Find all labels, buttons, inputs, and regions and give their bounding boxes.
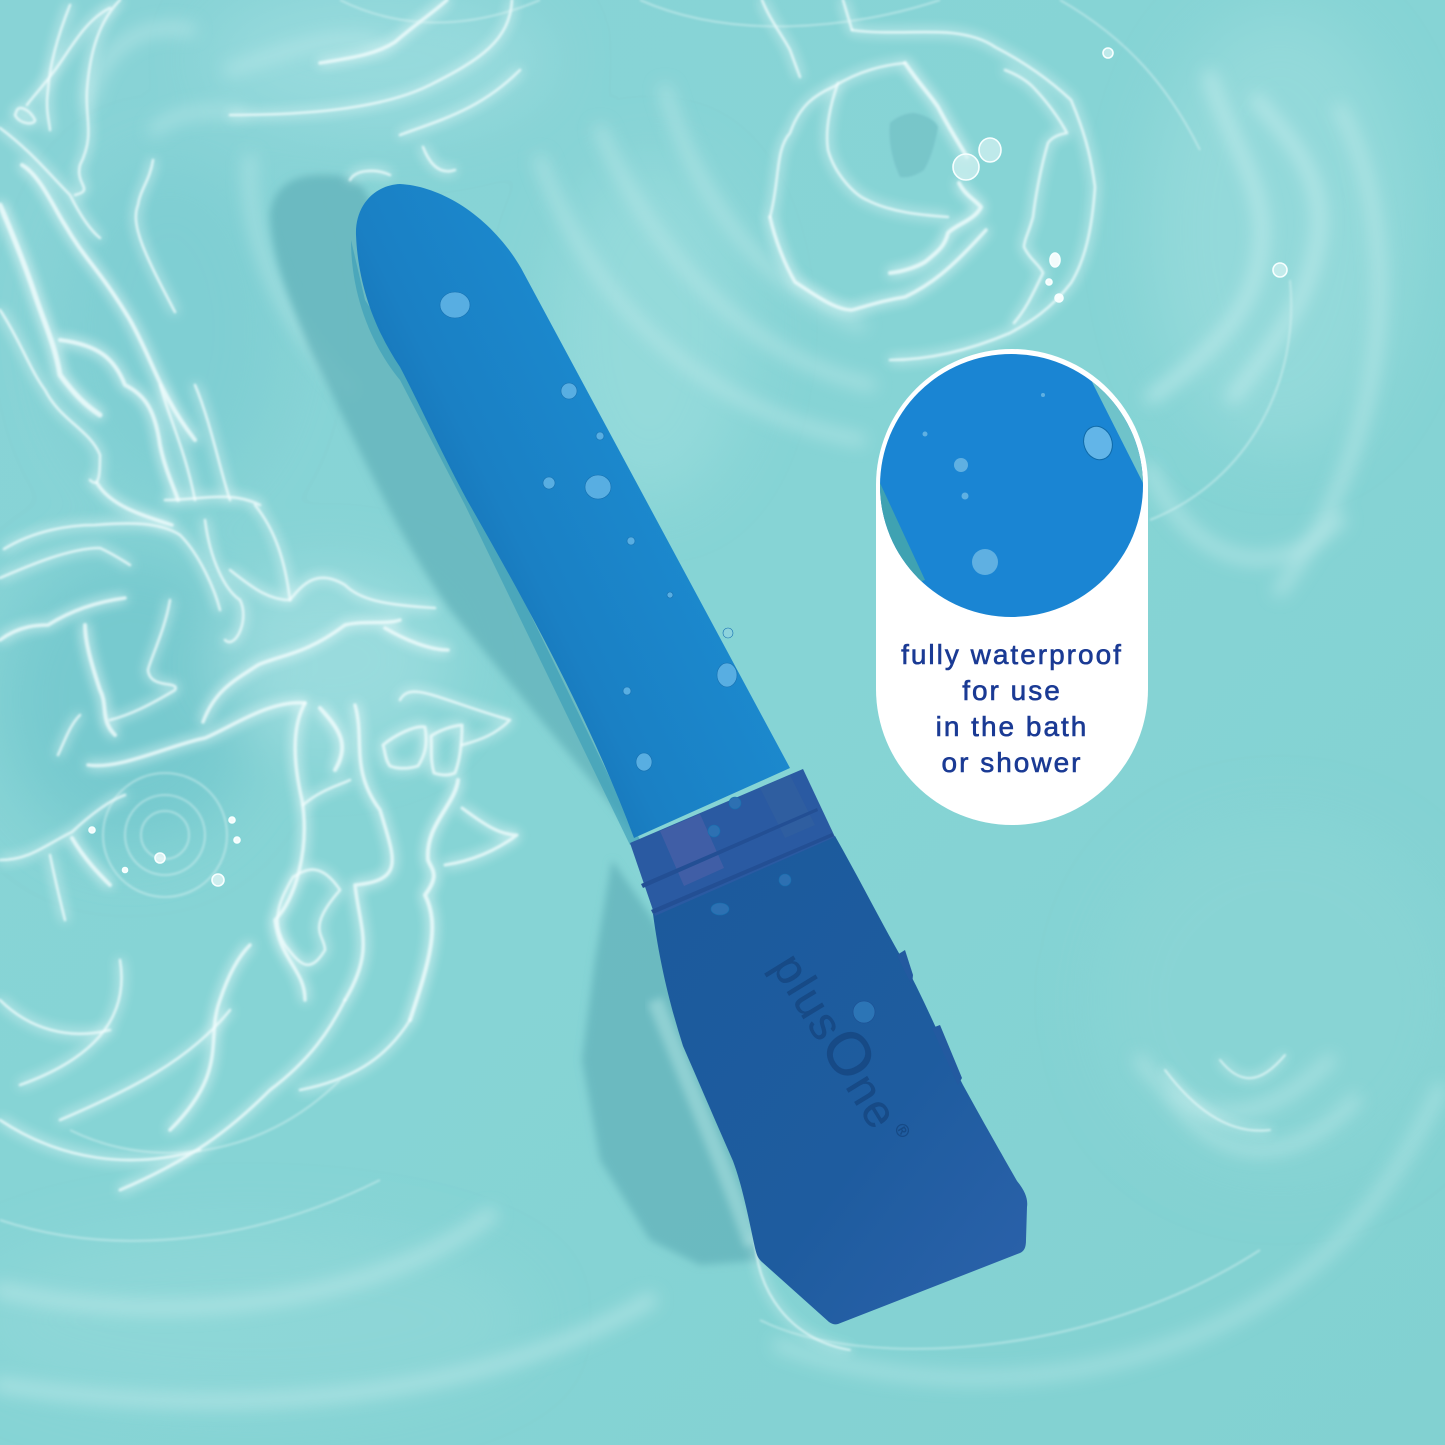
dark pocket of central splash [889, 113, 938, 177]
bubbles on the water surface [89, 48, 1287, 886]
callout text: for use [962, 675, 1062, 706]
collar [630, 769, 835, 916]
brand logo: plusOne [762, 944, 909, 1139]
brand logo: ® [890, 1120, 915, 1143]
callout text [901, 639, 1123, 778]
callout: fully waterproof [876, 349, 1148, 825]
blue shaft [356, 184, 790, 838]
callout text: or shower [942, 747, 1082, 778]
callout text: fully waterproof [901, 639, 1123, 670]
handle base [653, 836, 1027, 1324]
pale reflection beside handle [655, 1000, 752, 1245]
product: massager [351, 184, 1027, 1324]
zoomed product circle [870, 349, 1150, 621]
water droplets [440, 292, 875, 1023]
callout text: in the bath [936, 711, 1088, 742]
side buttons [897, 950, 962, 1085]
callout pill [876, 349, 1148, 825]
product shadow [270, 175, 765, 1265]
underwater lip of shaft [351, 240, 640, 845]
